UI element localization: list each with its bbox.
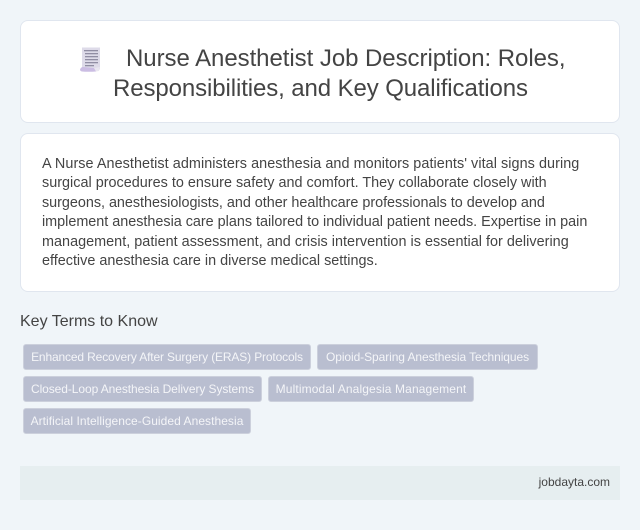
description text: surgeons, anesthesiologists, and other healthcare professionals to develop and <box>42 195 545 211</box>
footer source text: jobdayta.com <box>539 475 610 489</box>
tag: AI-guided: Artificial Intelligence-Guided Anesthesia <box>31 414 243 428</box>
panel: description card <box>20 133 620 292</box>
tag: closed-loop <box>23 376 262 402</box>
description text: effective anesthesia care in diverse medical settings. <box>42 253 378 269</box>
title: Responsibilities, and Key Qualifications <box>113 75 528 102</box>
title: Nurse Anesthetist Job Description: Roles, <box>126 45 566 72</box>
tag: ERAS <box>23 344 311 370</box>
tag: multimodal: Multimodal Analgesia Management <box>276 382 466 396</box>
tag: closed-loop: Closed-Loop Anesthesia Delivery Systems <box>31 382 254 396</box>
description text: A Nurse Anesthetist administers anesthesia and monitors patients' vital signs during <box>42 156 579 172</box>
description text: surgical procedures to ensure safety and comfort. They collaborate closely with <box>42 175 547 191</box>
tag list <box>23 344 538 434</box>
description text: implement anesthesia care plans tailored to individual patient needs. Expertise in pain <box>42 214 587 230</box>
tag: multimodal <box>268 376 474 402</box>
title <box>113 45 566 102</box>
description text <box>42 156 587 269</box>
tag: opioid-sparing <box>317 344 538 370</box>
description text: management, patient assessment, and crisis intervention is essential for delivering <box>42 234 569 250</box>
footer bar <box>20 466 620 500</box>
panel: title card <box>20 20 620 123</box>
tag: AI-guided <box>23 408 251 434</box>
tag: opioid-sparing: Opioid-Sparing Anesthesia Techniques <box>326 350 529 364</box>
heading: key terms: Key Terms to Know <box>20 313 158 330</box>
icon: document scroll <box>80 48 100 72</box>
tag: ERAS: Enhanced Recovery After Surgery (ERAS) Protocols <box>31 350 303 364</box>
